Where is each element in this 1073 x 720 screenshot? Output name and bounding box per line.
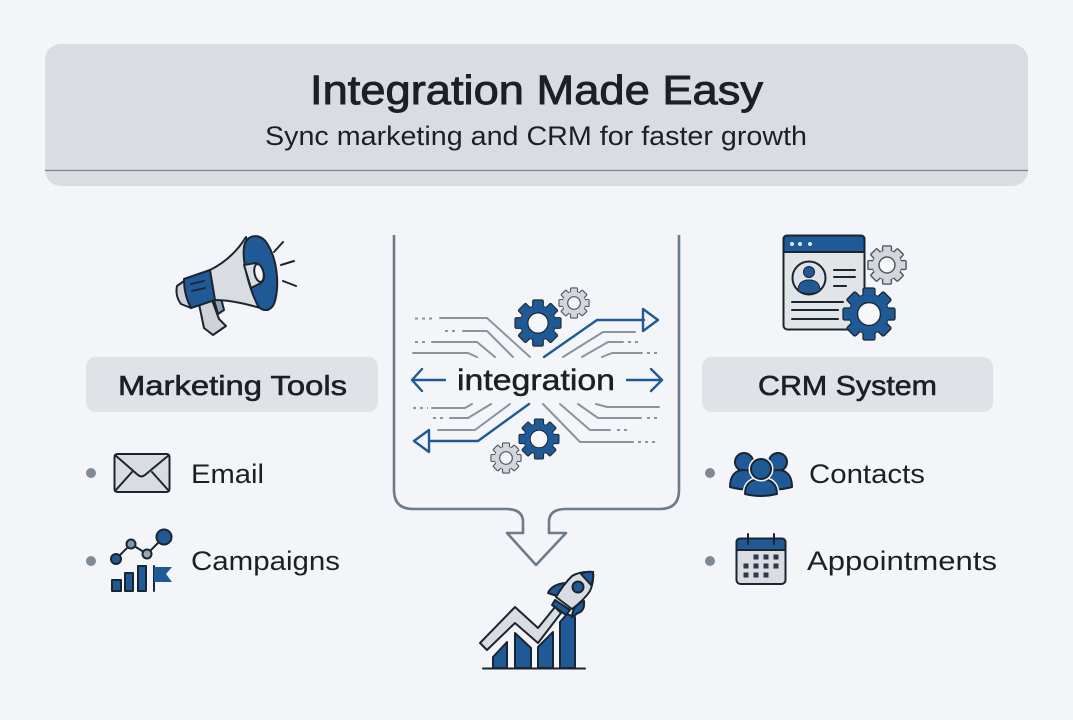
label: appointments: Appointments <box>807 546 997 576</box>
header banner <box>45 44 1028 186</box>
icon: megaphone <box>176 236 296 335</box>
label: campaigns: Campaigns <box>191 546 340 576</box>
funnel outline arrow <box>394 235 679 565</box>
bullet: appointments <box>705 556 715 566</box>
title: Integration Made Easy <box>310 67 764 113</box>
gear: bottom grey <box>491 443 521 473</box>
gear: top blue <box>515 300 561 346</box>
heading pill: marketing tools: Marketing Tools <box>118 370 347 401</box>
label: email: Email <box>191 459 264 489</box>
heading pill: crm system <box>702 357 993 412</box>
circuit traces: top right <box>544 309 659 357</box>
panel: integration <box>394 235 679 565</box>
bullet: email <box>86 468 96 478</box>
icon: rocket growth chart <box>480 572 593 668</box>
circuit traces: bottom right <box>543 404 659 442</box>
icon: crm window and gears <box>784 236 906 340</box>
panel: marketing tools <box>86 236 378 591</box>
icon: envelope <box>114 454 170 492</box>
subtitle: Sync marketing and CRM for faster growth <box>265 121 807 151</box>
circuit traces: top left <box>413 318 530 357</box>
gear: top grey <box>559 288 589 318</box>
arrow: left <box>412 369 445 391</box>
label: contacts: Contacts <box>809 459 925 489</box>
bullet: contacts <box>705 468 715 478</box>
circuit traces: bottom left <box>413 404 529 452</box>
bullet: campaigns <box>86 556 96 566</box>
gear: bottom blue <box>519 419 559 459</box>
panel: crm system <box>702 236 997 584</box>
header panel <box>45 44 1028 186</box>
icon: calendar <box>736 534 786 584</box>
icon: campaign chart <box>111 530 172 591</box>
integration label: integration <box>457 364 615 397</box>
icon: contacts group <box>730 453 792 496</box>
heading pill: marketing tools <box>86 357 378 412</box>
heading pill: crm system: CRM System <box>758 370 937 401</box>
arrow: right <box>627 369 662 391</box>
